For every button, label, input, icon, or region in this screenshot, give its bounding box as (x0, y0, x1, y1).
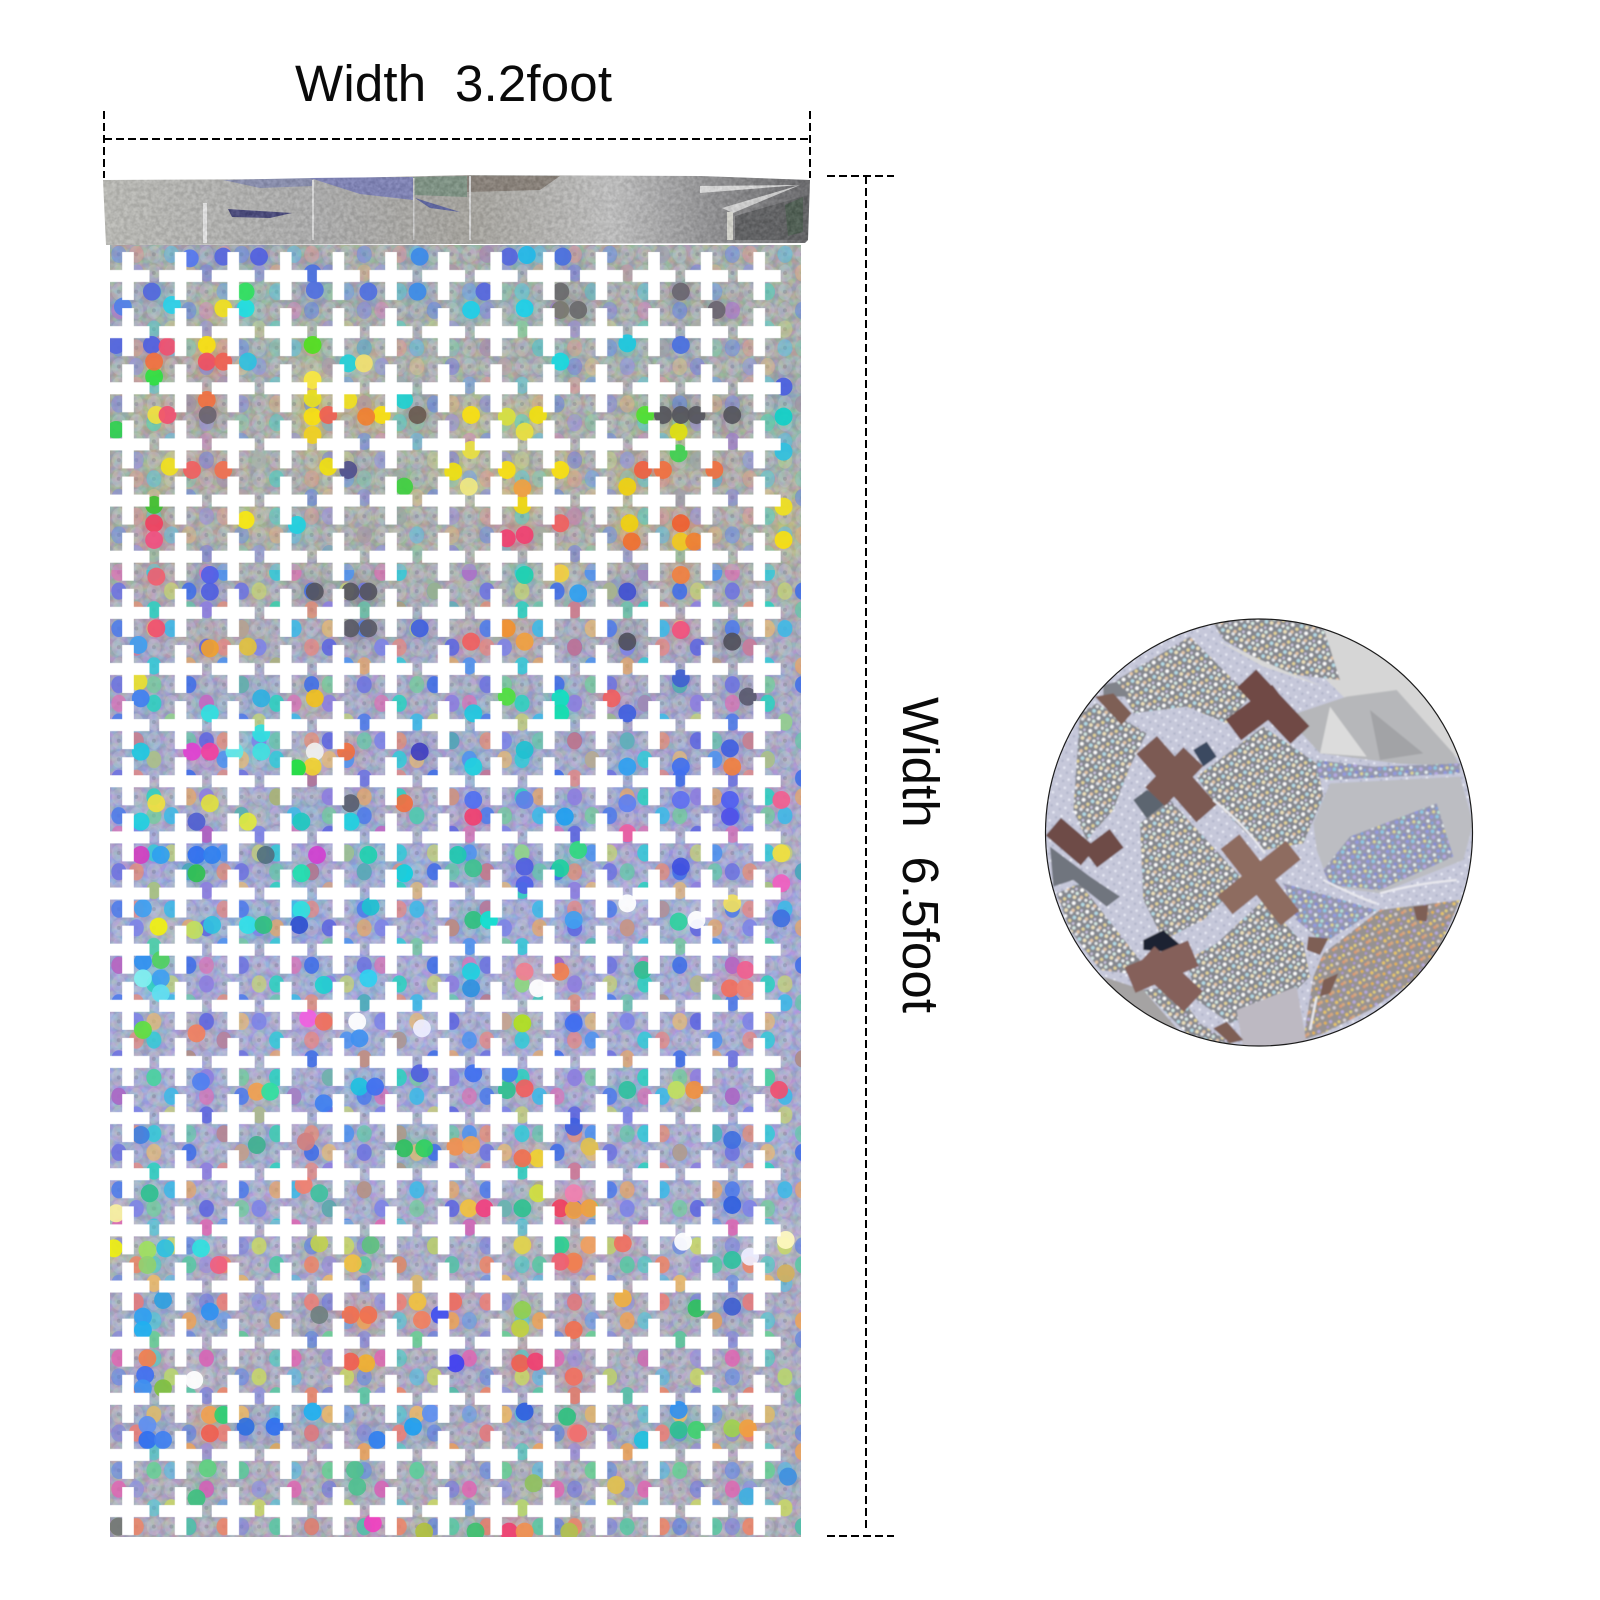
soft colour glow beneath sequins (105, 246, 797, 1541)
scattered cool sequins (110, 245, 801, 1537)
holographic sequin panel (105, 245, 801, 1541)
infographic canvas (103, 64, 1474, 1537)
top right backdrop (1324, 630, 1458, 758)
speckled panels (1117, 637, 1250, 723)
width label: Width 3.2foot (295, 55, 612, 112)
cross opening B (1147, 745, 1207, 813)
small brown openings (1307, 937, 1328, 955)
detail circle outline (1046, 619, 1472, 1046)
dark reflections in openings (1050, 847, 1120, 907)
curtain product (103, 175, 810, 1541)
white cross cut-outs (110, 245, 781, 1537)
sequin highlights: lower middle section (107, 894, 790, 1222)
brown cross openings (1233, 678, 1300, 735)
cross opening D (1225, 842, 1293, 918)
curtain header band (103, 175, 810, 245)
bright foil ridges (1213, 800, 1457, 1030)
sequin highlights: middle section (130, 564, 790, 894)
width dimension line (104, 111, 810, 178)
top foil folds (1210, 617, 1340, 680)
height dimension line (827, 176, 894, 1536)
sequin highlights: bottom section (105, 1231, 797, 1541)
cross opening E (1130, 953, 1193, 1002)
scattered warm sequins (110, 245, 801, 1537)
sequin highlights: upper section (107, 246, 792, 551)
cross opening A (1233, 678, 1300, 735)
height label: Width 6.5foot (892, 697, 949, 1013)
cross opening C (1053, 827, 1117, 858)
upper right silver foil (1287, 690, 1460, 767)
circular detail photo (1040, 615, 1480, 1055)
